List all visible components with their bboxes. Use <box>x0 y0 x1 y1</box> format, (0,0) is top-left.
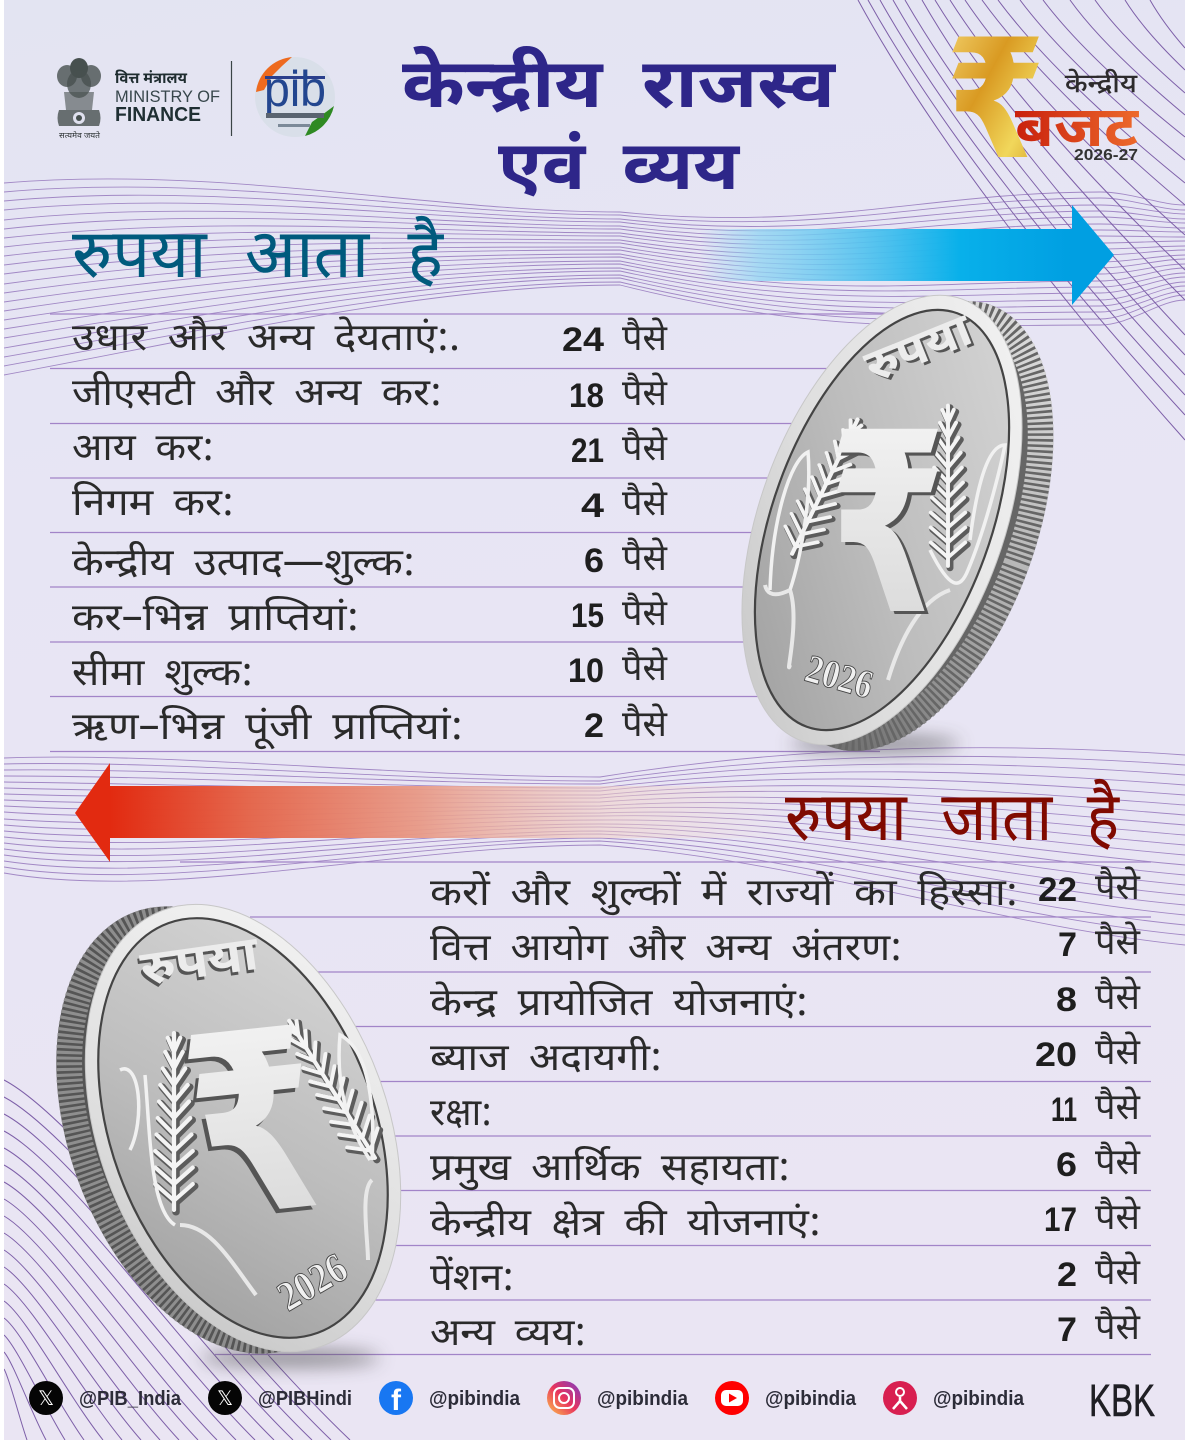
row: centrally sponsored <box>430 976 1141 1031</box>
emblem motto: सत्यमेव जयते <box>59 131 100 142</box>
row: centrally sponsored: पैसे <box>1095 976 1141 1024</box>
row: other expenditure: अन्य व्यय: <box>430 1311 586 1361</box>
footer social handles <box>29 1381 1025 1417</box>
credit: KBK: KBK <box>1089 1375 1155 1426</box>
row: interest: पैसे <box>1095 1031 1141 1079</box>
row: defence <box>430 1086 1141 1141</box>
row: pension: पेंशन: <box>430 1255 514 1306</box>
budget label top: केन्द्रीय <box>1065 68 1138 103</box>
row: interest <box>430 1031 1141 1086</box>
icon: gold rupee symbol: ₹ <box>945 7 1046 192</box>
row: centrally sponsored: 8 <box>1056 981 1077 1019</box>
row: finance commission: 7 <box>1058 926 1077 964</box>
row: non-debt capital: 2 <box>584 707 604 745</box>
handle: pibindia: @pibindia <box>765 1388 857 1410</box>
row: GST <box>72 370 668 421</box>
row: non-debt capital <box>72 703 668 755</box>
row: non-tax receipts: 15 <box>571 597 604 635</box>
row: customs: सीमा शुल्क: <box>72 650 253 701</box>
row: customs <box>72 647 668 701</box>
coin year: 2026 <box>801 645 878 707</box>
arrow: red expenditure arrow <box>75 763 800 862</box>
heading: money comes in: रुपया आता है <box>72 216 445 305</box>
handle: PIBHindi: @PIBHindi <box>258 1388 352 1410</box>
row: major subsidies: प्रमुख आर्थिक सहायता: <box>430 1145 790 1196</box>
row: central sector: केन्द्रीय क्षेत्र की योजनाएं: <box>430 1200 821 1251</box>
handle: pibindia: @pibindia <box>429 1388 521 1410</box>
row: corporation tax: 4 <box>581 487 604 525</box>
row: states share: 22 <box>1038 871 1077 909</box>
row: GST: जीएसटी और अन्य कर: <box>72 370 442 421</box>
row: finance commission <box>430 921 1141 976</box>
row: non-debt capital: पैसे <box>622 703 668 751</box>
coin shadow <box>790 736 960 752</box>
coin face <box>687 257 1077 783</box>
title line 1: केन्द्रीय राजस्व <box>402 46 837 135</box>
coin edge <box>713 262 1109 790</box>
rupee symbol on coin: ₹ <box>165 980 351 1268</box>
ministry name english: MINISTRY OF <box>115 87 220 106</box>
icon: state emblem <box>57 58 101 126</box>
row: interest: ब्याज अदायगी: <box>430 1035 662 1086</box>
row: GST: पैसे <box>622 372 668 420</box>
icon: X <box>29 1381 63 1415</box>
row: other expenditure: पैसे <box>1095 1306 1141 1354</box>
row: GST: 18 <box>569 377 604 415</box>
title <box>402 46 837 217</box>
icon: X: 𝕏 <box>38 1388 54 1410</box>
icon: Facebook: f <box>391 1384 402 1417</box>
row: income tax: पैसे <box>622 427 668 475</box>
expenditure rows <box>430 866 1141 1361</box>
icon: Instagram <box>547 1381 581 1415</box>
income rows <box>72 315 668 755</box>
row: excise: 6 <box>584 542 604 580</box>
row: defence: पैसे <box>1095 1086 1141 1134</box>
row: central sector <box>430 1196 1141 1251</box>
row: major subsidies <box>430 1141 1141 1196</box>
coin year: 2026 <box>270 1245 355 1321</box>
row: pension: पैसे <box>1095 1251 1141 1299</box>
coin edge <box>0 862 430 1398</box>
coin: bottom left <box>0 860 459 1398</box>
row: states share: पैसे <box>1095 866 1141 914</box>
budget year: 2026-27 <box>1074 147 1138 164</box>
row: income tax: 21 <box>571 432 604 470</box>
logo: Ministry of Finance <box>57 58 220 142</box>
icon: X: 𝕏 <box>217 1388 233 1410</box>
coin text: रुपया <box>861 305 987 403</box>
logo: PIB <box>255 57 335 137</box>
row: major subsidies: पैसे <box>1095 1141 1141 1189</box>
icon: X <box>208 1381 242 1415</box>
icon: Koo-style person <box>883 1381 917 1415</box>
wheat ears on coin <box>765 406 1005 680</box>
row: excise: केन्द्रीय उत्पाद—शुल्क: <box>72 540 415 591</box>
row: excise <box>72 537 668 591</box>
icon: YouTube <box>715 1381 749 1415</box>
logo: Union Budget 2026-27 <box>945 7 1139 192</box>
budget word: बजट <box>1015 96 1139 169</box>
row: finance commission: वित्त आयोग और अन्य अंतरण: <box>430 925 902 976</box>
handle: PIB_India: @PIB_India <box>79 1388 182 1410</box>
row: central sector: 17 <box>1044 1201 1077 1239</box>
row: non-debt capital: ऋण–भिन्न पूंजी प्राप्तियां: <box>72 704 463 755</box>
row: customs: पैसे <box>622 647 668 695</box>
row: other expenditure <box>430 1306 1141 1361</box>
logo: PIB: pib <box>264 61 326 117</box>
icon: Facebook <box>379 1381 413 1417</box>
ministry name hindi: वित्त मंत्रालय <box>115 70 187 90</box>
row: central sector: पैसे <box>1095 1196 1141 1244</box>
row: borrowings: उधार और अन्य देयताएं:. <box>72 315 460 366</box>
row: corporation tax: निगम कर: <box>72 480 234 531</box>
row: interest: 20 <box>1035 1036 1077 1074</box>
row: non-tax receipts <box>72 592 668 646</box>
coin text: रुपया <box>137 926 264 1005</box>
heading: money goes out: रुपया जाता है <box>785 779 1121 868</box>
row: pension <box>430 1251 1141 1306</box>
row: income tax: आय कर: <box>72 426 214 476</box>
row: states share: करों और शुल्कों में राज्यों का हिस्सा: <box>430 870 1018 921</box>
finance: FINANCE <box>115 104 201 126</box>
row: major subsidies: 6 <box>1056 1146 1077 1184</box>
row: finance commission: पैसे <box>1095 921 1141 969</box>
coin text: रुपया <box>135 929 262 1008</box>
handle: pibindia: @pibindia <box>933 1388 1025 1410</box>
row: defence: 11 <box>1051 1091 1077 1129</box>
coin text: रुपया <box>858 303 984 401</box>
arrow: blue income arrow <box>700 205 1114 305</box>
row: corporation tax: पैसे <box>622 482 668 530</box>
row: corporation tax <box>72 480 668 531</box>
coin shadow <box>200 1349 380 1367</box>
coin: top right <box>687 257 1109 790</box>
row: non-tax receipts: कर–भिन्न प्राप्तियां: <box>72 595 359 646</box>
handle: pibindia: @pibindia <box>597 1388 689 1410</box>
wheat ears on coin <box>120 1011 392 1295</box>
row: income tax <box>72 426 668 476</box>
coin face <box>27 860 459 1396</box>
row: customs: 10 <box>568 652 604 690</box>
row: borrowings: पैसे <box>622 317 668 365</box>
title line 2: एवं व्यय <box>498 128 741 217</box>
row: centrally sponsored: केन्द्र प्रायोजित योजनाएं: <box>430 980 808 1031</box>
row: borrowings: 24 <box>562 321 604 359</box>
row: defence: रक्षा: <box>430 1091 492 1141</box>
rupee symbol on coin: ₹ <box>828 385 946 665</box>
rupee symbol on coin: ₹ <box>832 388 950 668</box>
row: states share <box>430 866 1141 921</box>
row: other expenditure: 7 <box>1057 1311 1077 1349</box>
row: borrowings <box>72 315 668 366</box>
row: excise: पैसे <box>622 537 668 585</box>
row: non-tax receipts: पैसे <box>622 592 668 640</box>
row: pension: 2 <box>1057 1256 1077 1294</box>
rupee symbol on coin: ₹ <box>161 984 348 1273</box>
